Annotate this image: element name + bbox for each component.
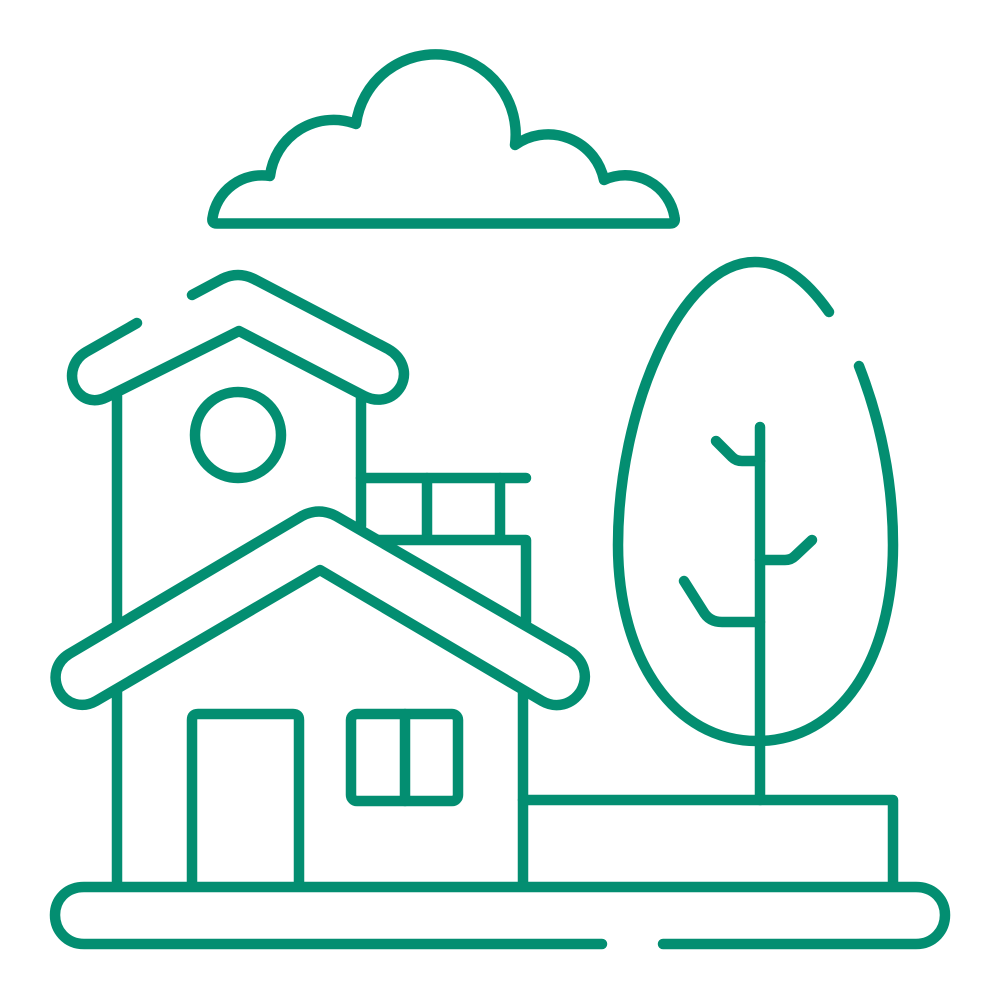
icon: main house walls	[117, 691, 523, 886]
icon: window	[351, 714, 458, 801]
icon: upper house roof	[72, 275, 404, 400]
icon: garden fence	[523, 800, 893, 886]
icon: round attic window	[195, 392, 281, 478]
icon: main house roof	[56, 512, 585, 705]
icon: tree crown	[618, 262, 893, 741]
icon: door	[192, 714, 299, 886]
icon: balcony railing	[361, 478, 526, 622]
icon: tree trunk and branches	[684, 427, 812, 800]
icon: cloud	[212, 54, 675, 223]
icon: ground	[55, 887, 945, 944]
icon: upper house walls	[117, 396, 361, 622]
